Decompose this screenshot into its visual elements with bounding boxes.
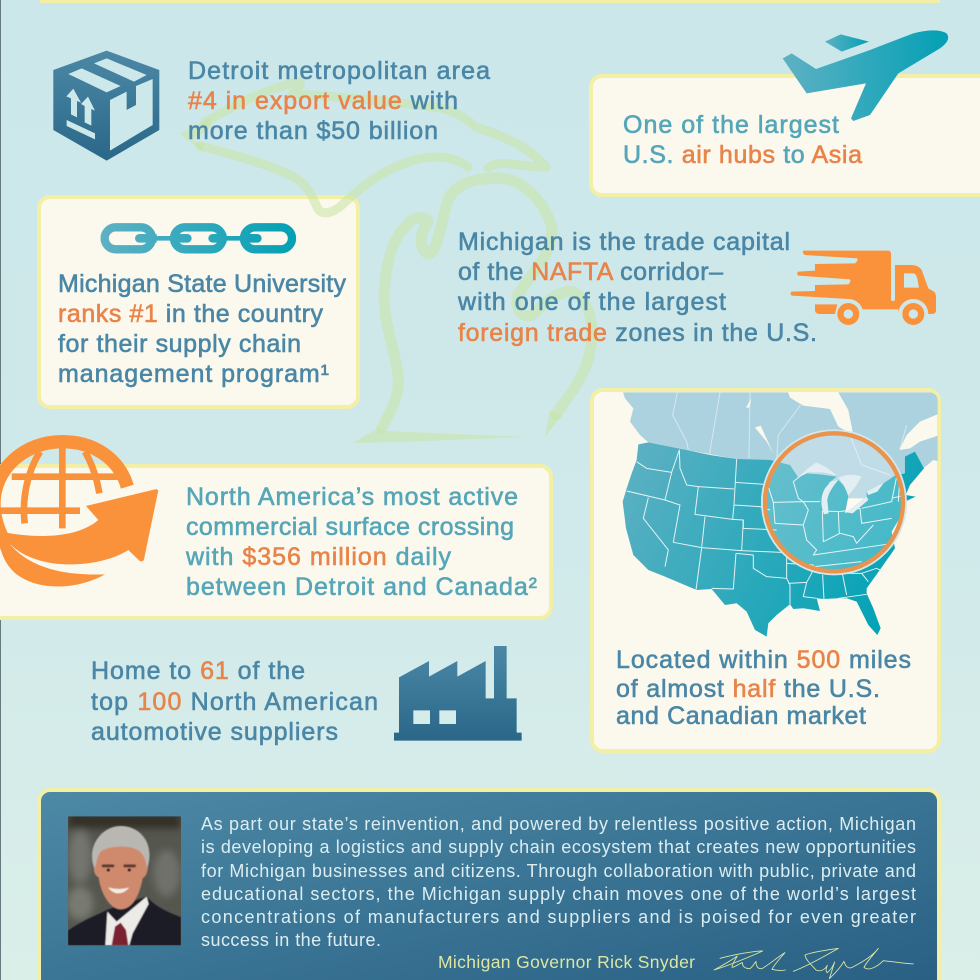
panel: Michigan State University (39, 197, 358, 407)
icon: package box (53, 51, 159, 161)
text: NAFTA corridor: of the NAFTA corridor– (458, 258, 723, 286)
icon: airplane (783, 30, 948, 121)
panel: air hubs (591, 76, 980, 195)
text: automotive suppliers: top 100 North American (91, 688, 378, 716)
panel: surface crossing (0, 466, 551, 618)
signature (714, 948, 913, 979)
text: market reach: of almost half the U.S. (616, 675, 880, 703)
text: Michigan State University (58, 270, 346, 388)
quote text: is developing a logistics and supply chain ecosystem that creates new opportunities (201, 837, 916, 857)
text: surface crossing (185, 483, 537, 601)
Great Lakes (798, 462, 884, 514)
text: air hubs: One of the largest (623, 111, 839, 139)
United States (623, 442, 924, 637)
text: automotive suppliers (91, 657, 378, 746)
icon: factory (394, 646, 522, 741)
quote text (201, 814, 916, 950)
attribution: Michigan Governor Rick Snyder (438, 952, 695, 972)
text: surface crossing: commercial surface crossing (186, 513, 514, 541)
quote text: for Michigan businesses and citizens. Through collaboration with public, private and (201, 861, 916, 881)
text: export value: Detroit metropolitan area (188, 57, 490, 85)
panel: map (592, 390, 939, 751)
map of the United States (622, 388, 940, 637)
text: export value: more than $50 billion (188, 117, 438, 145)
icon: globe with arrow (0, 442, 158, 586)
text: market reach: and Canadian market (616, 702, 866, 730)
state borders (627, 450, 905, 604)
text: market reach (616, 646, 911, 730)
text: market reach: Located within 500 miles (616, 646, 911, 674)
text: air hubs (623, 111, 862, 169)
quote text: success in the future. (201, 930, 381, 950)
text: surface crossing: with $356 million daily (185, 543, 452, 571)
text: Michigan State University: Michigan State University (58, 270, 346, 298)
Canadian province borders and lakes (673, 392, 907, 475)
quote text: educational sectors, the Michigan supply chain moves one of the world’s largest (201, 884, 916, 904)
quote text: As part our state’s reinvention, and powered by relentless positive action, Michigan (201, 814, 916, 834)
icon: delivery truck (790, 251, 936, 325)
text: NAFTA corridor (457, 228, 817, 347)
text: surface crossing: between Detroit and Canada² (186, 573, 537, 601)
text: air hubs: U.S. air hubs to Asia (623, 141, 862, 169)
Canada (622, 388, 940, 498)
Michigan state outline watermark (180, 82, 592, 443)
panel: governor quote (39, 790, 939, 980)
text: export value: #4 in export value with (188, 87, 458, 115)
text: automotive suppliers: automotive suppliers (91, 718, 338, 746)
text: automotive suppliers: Home to 61 of the (91, 657, 305, 685)
text: NAFTA corridor: Michigan is the trade capital (458, 228, 790, 256)
text: NAFTA corridor: foreign trade zones in the U.S. (458, 319, 817, 347)
text: Michigan State University: for their supply chain (58, 330, 301, 358)
quote text: concentrations of manufacturers and suppliers and is poised for even greater (201, 907, 916, 927)
governor portrait (67, 813, 181, 945)
text: surface crossing: North America’s most active (186, 483, 518, 511)
text: export value (188, 57, 490, 145)
text: Michigan State University: ranks #1 in the country (58, 300, 324, 328)
text: Michigan State University: management program¹ (58, 360, 329, 388)
icon: chain links (105, 227, 292, 249)
highlight circle around the Great Lakes (762, 430, 906, 574)
text: NAFTA corridor: with one of the largest (457, 288, 726, 316)
